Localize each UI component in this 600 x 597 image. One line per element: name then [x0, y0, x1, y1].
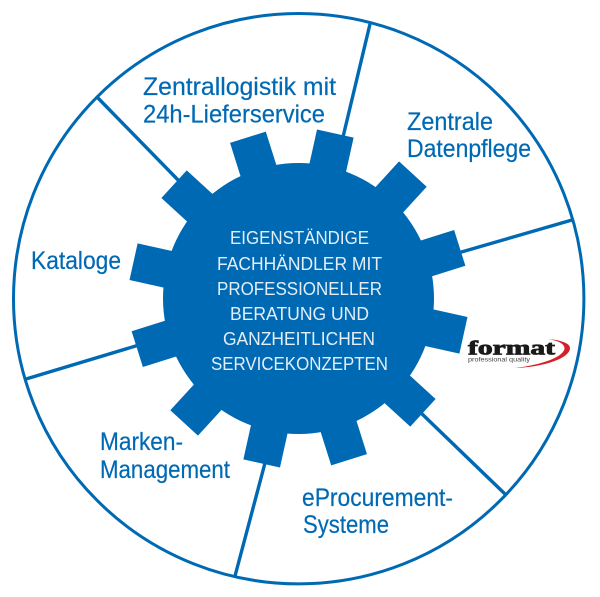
logo: format professional quality: professional quality [468, 356, 531, 364]
label: eProcurement-Systeme [302, 484, 453, 539]
central gear [130, 130, 467, 467]
central text: EIGENSTÄNDIGE [230, 228, 369, 248]
label: Kataloge: Kataloge [31, 247, 121, 275]
label: Zentrallogistik: Zentrallogistik mit [143, 73, 336, 101]
central text: FACHHÄNDLER MIT [217, 254, 382, 274]
label: Zentrale Datenpflege: Zentrale [407, 108, 493, 136]
logo: format professional quality [468, 338, 570, 368]
logo: format professional quality: format [468, 338, 555, 360]
label: Zentrale Datenpflege: Datenpflege [407, 135, 531, 163]
label: Marken-Management [100, 428, 230, 484]
central text: BERATUNG UND [230, 304, 369, 324]
central text: PROFESSIONELLER [217, 279, 382, 299]
label: eProcurement-Systeme: eProcurement- [302, 484, 453, 512]
label: eProcurement-Systeme: Systeme [303, 511, 389, 539]
label: Marken-Management: Management [100, 456, 230, 484]
label: Zentrale Datenpflege [407, 108, 531, 163]
label: Zentrallogistik: 24h-Lieferservice [143, 100, 325, 128]
label: Marken-Management: Marken- [100, 428, 183, 456]
central text: GANZHEITLICHEN [223, 329, 375, 349]
label: Zentrallogistik [143, 73, 336, 128]
central text: SERVICEKONZEPTEN [211, 354, 388, 374]
central text [211, 228, 388, 374]
